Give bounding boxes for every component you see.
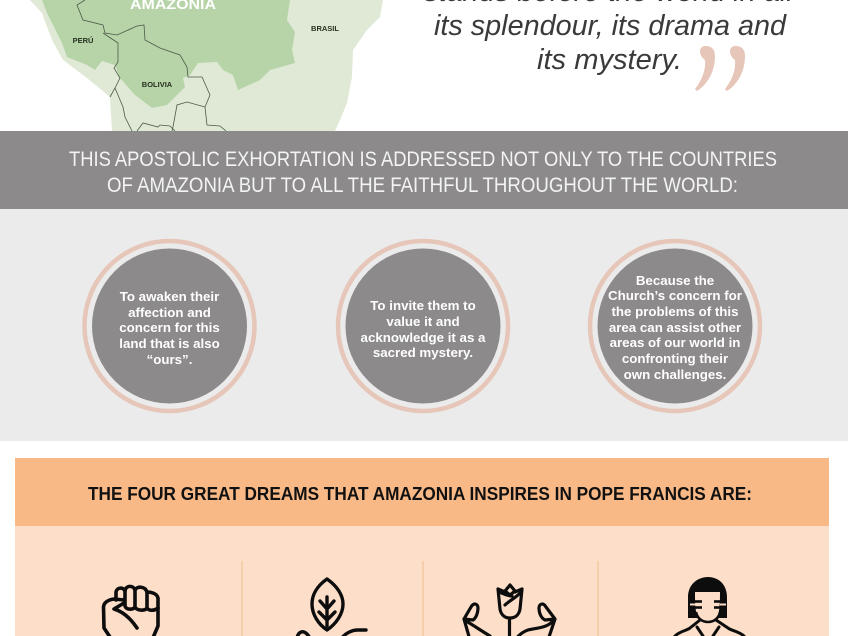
quote text: its mystery. [537, 44, 682, 76]
banner: addressed to all the faithful [0, 131, 848, 209]
label: Perú: PERÚ [73, 36, 93, 45]
label: Bolivia: BOLIVIA [142, 80, 173, 89]
panel: three reasons [0, 209, 848, 441]
heading: four great dreams: THE FOUR GREAT DREAMS THAT AMAZONIA INSPIRES IN POPE FRANCIS ARE: [88, 484, 752, 504]
circle: the Church's concern: area can assist other [609, 320, 741, 335]
circle: sacred mystery: acknowledge it as a [361, 330, 486, 345]
icon: rose in hands [464, 585, 555, 636]
circle: the Church's concern: confronting their [622, 351, 728, 366]
circle: sacred mystery: To invite them to [370, 298, 476, 313]
circle: the Church's concern [590, 241, 760, 411]
circle: awaken affection: concern for this [119, 320, 220, 335]
banner: addressed to all the faithful: OF AMAZONIA BUT TO ALL THE FAITHFUL THROUGHOUT THE WORLD: [107, 174, 738, 197]
label: Brasil: BRASIL [311, 24, 339, 33]
icon: raised fist [104, 586, 158, 636]
map of Amazonia [30, 0, 383, 131]
quote text: its splendour, its drama and [434, 10, 787, 42]
circle: sacred mystery [338, 241, 508, 411]
circle: the Church's concern: the problems of this [611, 304, 739, 319]
circle: the Church's concern: areas of our world in [610, 335, 740, 350]
panel: four great dreams [15, 458, 829, 636]
icon: closing quotation marks [695, 46, 745, 91]
icon: leaf over hands [297, 579, 366, 636]
icon: indigenous person [675, 577, 744, 636]
circle: sacred mystery: sacred mystery. [373, 345, 473, 360]
circle: awaken affection: “ours”. [147, 352, 192, 367]
circle: awaken affection: land that is also [119, 336, 220, 351]
circle: the Church's concern: Because the [636, 273, 714, 288]
circle: awaken affection: To awaken their [120, 289, 219, 304]
quote text [424, 0, 795, 76]
circle: awaken affection [84, 241, 254, 411]
circle: the Church's concern: own challenges. [624, 367, 726, 382]
circle: awaken affection: affection and [128, 305, 211, 320]
circle: the Church's concern: Church’s concern for [608, 288, 742, 303]
circle: sacred mystery: value it and [386, 314, 460, 329]
heading: four great dreams [15, 458, 829, 526]
